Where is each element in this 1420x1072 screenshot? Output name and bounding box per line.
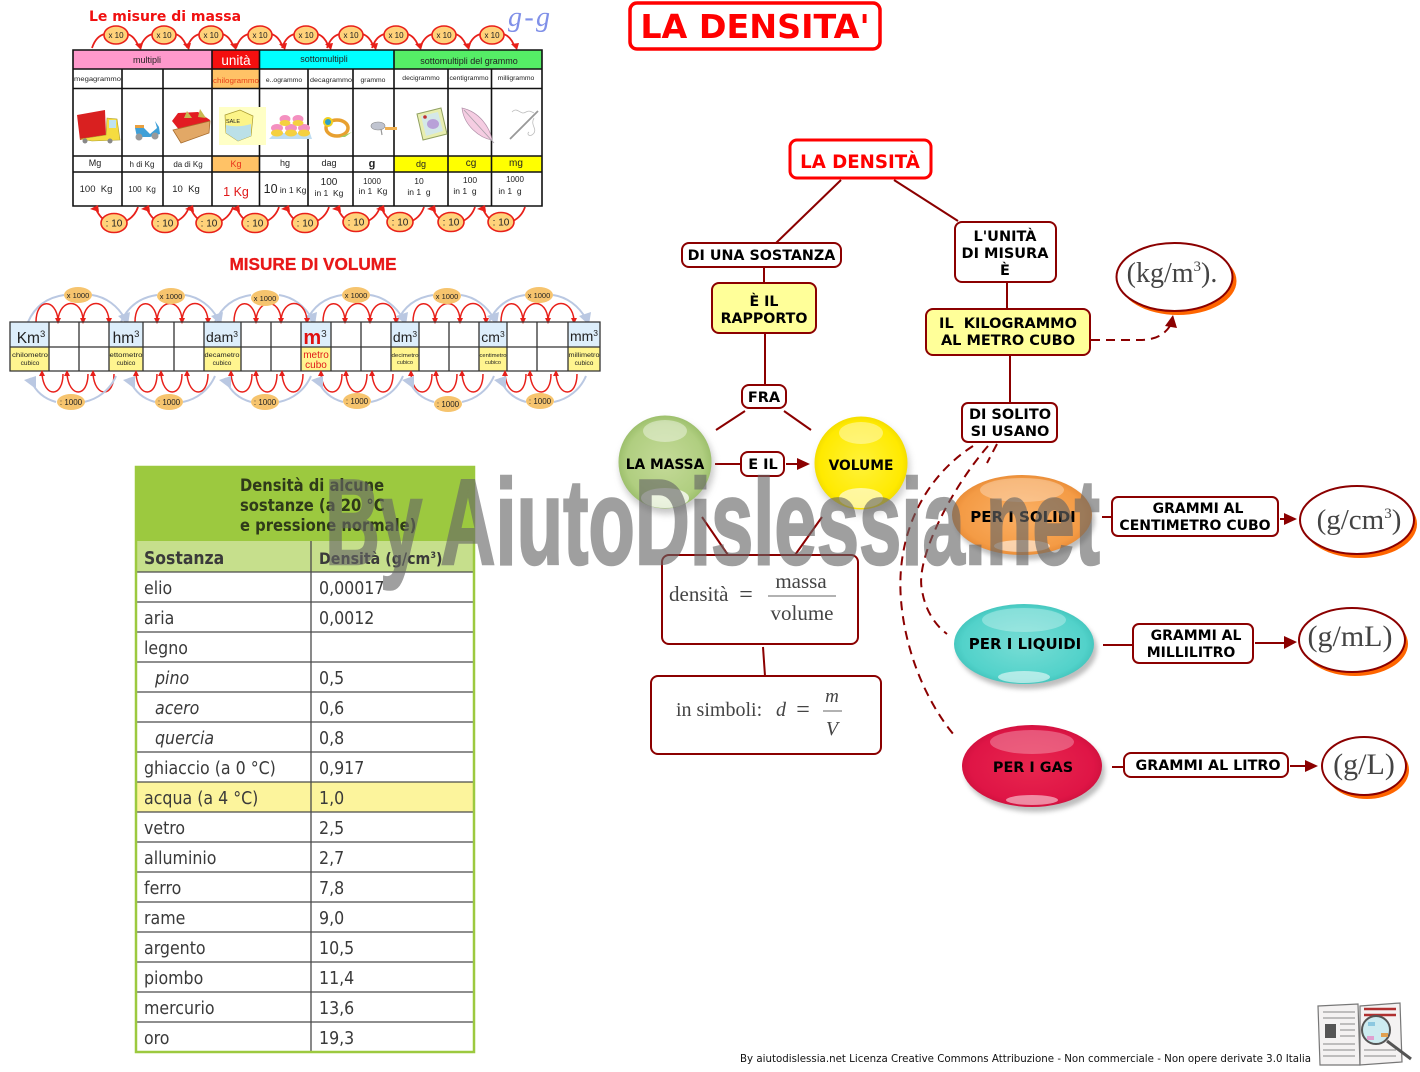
- density table: 0,5: [319, 669, 344, 689]
- density table: oro: [144, 1029, 169, 1049]
- icon: needle and thread: [510, 110, 538, 139]
- divide by ten arrows: : 10: [106, 218, 123, 230]
- volume units table: cubo: [305, 360, 327, 371]
- unit: kg/m3: (kg/m: [1127, 258, 1194, 289]
- mass units table: 10 in 1 Kg: [264, 182, 307, 196]
- volume units table: cubico: [213, 360, 232, 367]
- volume units table: 3: [134, 329, 139, 340]
- volume units table: millimetro: [568, 352, 600, 359]
- mass units table: dg: [416, 159, 426, 169]
- node: grammi al litro: [1124, 753, 1288, 777]
- formula: symbols: m: [825, 686, 839, 707]
- unit: g/cm3: [1300, 486, 1417, 558]
- divide by ten arrows: : 10: [247, 218, 264, 230]
- density table: Densità di alcune: [240, 476, 384, 495]
- volume units table: Km: [17, 330, 40, 347]
- node: il kilogrammo al metro cubo: [926, 309, 1090, 355]
- density table: 0,6: [319, 699, 344, 719]
- multiply by ten arrows: [92, 26, 519, 50]
- volume multiply arcs: x 1000: [528, 291, 550, 300]
- mass units table: in 1 g: [407, 187, 431, 197]
- oval: per i gas: PER I GAS: [993, 760, 1073, 776]
- unit: g/mL: [1299, 608, 1408, 676]
- node: fra: [742, 385, 786, 408]
- node: e il with arrow: E IL: [748, 457, 778, 473]
- density table: mercurio: [144, 999, 215, 1019]
- node: grammi al centimetro cubo: [1112, 497, 1278, 536]
- multiply by ten arrows: x 10: [203, 31, 219, 40]
- volume units table: cubico: [397, 360, 413, 366]
- formula: symbols: =: [796, 697, 810, 723]
- volume units table: [10, 322, 600, 371]
- formula: symbols: in simboli:: [676, 699, 762, 721]
- oval: per i solidi: [952, 475, 1095, 560]
- volume units table: cubico: [575, 360, 594, 367]
- node: l'unità di misura è: È: [1000, 262, 1010, 279]
- volume units table: decametro: [204, 352, 240, 359]
- density table: 19,3: [319, 1029, 354, 1049]
- node: grammi al litro: GRAMMI AL LITRO: [1135, 758, 1281, 774]
- volume units table: 3: [412, 329, 417, 339]
- volume units table: dam: [206, 329, 233, 345]
- icon: ring: [323, 117, 352, 137]
- multiply by ten arrows: x 10: [343, 31, 359, 40]
- mass units table: sottomultipli: [300, 54, 348, 64]
- multiply by ten arrows: x 10: [298, 31, 314, 40]
- density table: elio: [144, 579, 172, 599]
- volume divide arcs: : 1000: [346, 397, 369, 406]
- volume divide arcs: : 1000: [437, 400, 460, 409]
- mass units table: in 1 Kg: [315, 188, 344, 198]
- volume units table: dm: [393, 329, 412, 345]
- mass units table: in 1 g: [453, 186, 477, 196]
- density table: 10,5: [319, 939, 354, 959]
- unit: g/cm3: ): [1392, 504, 1401, 536]
- density table: 0,0012: [319, 609, 374, 629]
- sphere: volume: [814, 416, 910, 515]
- volume units table: 3: [233, 329, 238, 339]
- density table: pino: [154, 669, 189, 689]
- volume divide arcs: : 1000: [60, 398, 83, 407]
- mass units table: [73, 50, 542, 206]
- multiply by ten arrows: x 10: [156, 31, 172, 40]
- oval: per i liquidi: PER I LIQUIDI: [969, 635, 1081, 653]
- volume units table: 3: [321, 329, 327, 340]
- mass units table: 1 Kg: [223, 185, 249, 199]
- divide by ten arrows: : 10: [348, 218, 365, 228]
- oval: per i gas: [962, 725, 1105, 812]
- density table: ): [436, 549, 442, 568]
- mass units table: 100: [463, 175, 477, 185]
- mass units table: unità: [221, 53, 251, 68]
- icon: pin: [371, 122, 397, 135]
- multiply by ten arrows: x 10: [108, 31, 124, 40]
- icon: crate of apples: [172, 109, 210, 143]
- divide by ten arrows: : 10: [297, 218, 314, 230]
- density table: piombo: [144, 969, 203, 989]
- density table: 2,5: [319, 819, 344, 839]
- mass units table: megagrammo: [74, 76, 121, 83]
- volume units table: 3: [500, 329, 505, 339]
- icon: pastries: [269, 115, 312, 139]
- density table: vetro: [144, 819, 185, 839]
- volume units table: cubico: [117, 360, 136, 367]
- node: di una sostanza: DI UNA SOSTANZA: [688, 248, 835, 264]
- sphere: volume: VOLUME: [829, 458, 893, 474]
- node: di solito si usano: [962, 403, 1057, 442]
- node: è il rapporto: È IL: [750, 293, 778, 310]
- density table: rame: [144, 909, 185, 929]
- connector lines: [702, 180, 1133, 767]
- density table: e pressione normale): [240, 516, 416, 535]
- node: e il with arrow: [741, 452, 810, 476]
- multiply by ten arrows: x 10: [388, 31, 404, 40]
- node: di solito si usano: SI USANO: [971, 424, 1049, 440]
- mass units table: hg: [280, 158, 290, 168]
- divide by ten arrows: : 10: [493, 218, 510, 228]
- icon: feather: [462, 108, 494, 143]
- density table: Sostanza: [144, 549, 224, 569]
- mass units table: g: [369, 158, 375, 170]
- density table: acero: [155, 699, 199, 719]
- icon: salt box: [219, 107, 266, 145]
- mass units table: 100 Kg: [80, 184, 112, 195]
- density table: legno: [144, 639, 188, 659]
- density table: 9,0: [319, 909, 344, 929]
- mass units table: dag: [321, 158, 337, 168]
- unit: kg/m3: 3: [1194, 259, 1201, 275]
- volume units table: decimetro: [392, 353, 418, 359]
- footer licence text: By aiutodislessia.net Licenza Creative Commons Attribuzione - Non commerciale - Non opere derivate 3.0 Italia: [740, 1052, 1311, 1065]
- volume units table: cubico: [21, 360, 40, 367]
- volume divide arcs: [24, 370, 586, 412]
- node: grammi al millilitro: [1133, 624, 1253, 663]
- density table: sostanze (a 20 °C: [240, 496, 385, 515]
- unit: g/mL: (g/mL): [1308, 620, 1392, 653]
- mass units table: cg: [466, 158, 476, 169]
- density table: ghiaccio (a 0 °C): [144, 759, 276, 779]
- mass units table: Mg: [89, 158, 101, 168]
- mass units table: in 1 g: [498, 186, 522, 196]
- volume multiply arcs: x 1000: [436, 292, 458, 301]
- mass units table: chilogrammo: [213, 76, 259, 85]
- volume units table: chilometro: [12, 352, 48, 359]
- mass units table: mg: [509, 158, 523, 169]
- density table: 3: [430, 551, 436, 561]
- node: la densità: [790, 140, 931, 178]
- mass units table: grammo: [361, 77, 386, 84]
- volume units table: 3: [40, 329, 45, 340]
- unit: g/L: [1322, 737, 1409, 799]
- sphere: la massa: [618, 416, 714, 514]
- formula: symbols: d: [776, 699, 787, 721]
- volume units table: ettometro: [110, 352, 143, 359]
- density table: 0,00017: [319, 579, 384, 599]
- density table: 0,8: [319, 729, 344, 749]
- node: grammi al centimetro cubo: CENTIMETRO CUBO: [1119, 518, 1271, 534]
- mass units table: 100: [321, 177, 338, 188]
- divide by ten arrows: : 10: [443, 218, 460, 228]
- sphere: la massa: LA MASSA: [626, 457, 705, 473]
- mass units table: decigrammo: [402, 75, 440, 82]
- node: l'unità di misura è: DI MISURA: [962, 246, 1049, 262]
- density table: 0,917: [319, 759, 364, 779]
- density table: [136, 467, 474, 1052]
- arrow to g/L: [1290, 760, 1318, 772]
- node: è il rapporto: [712, 283, 816, 333]
- node: fra: FRA: [748, 390, 781, 406]
- arrow to g/cm3: [1280, 513, 1297, 525]
- heading: le misure di massa: Le misure di massa: [89, 9, 241, 25]
- volume multiply arcs: x 1000: [67, 291, 89, 300]
- heading: misure di volume: MISURE DI VOLUME: [229, 254, 397, 274]
- icon: open book with magnifier: [1318, 1003, 1411, 1065]
- density table: Densità (g/cm: [319, 549, 430, 568]
- divide by ten arrows: : 10: [157, 218, 174, 230]
- handwritten note: g - g: [508, 2, 550, 33]
- volume units table: cubico: [485, 360, 501, 366]
- volume units table: cm: [481, 329, 500, 345]
- arrow to g/mL: [1255, 636, 1297, 649]
- formula: density: densità: [669, 582, 729, 606]
- density table: acqua (a 4 °C): [144, 789, 258, 809]
- formula: density: =: [739, 582, 753, 608]
- dashed connectors to states of matter: [900, 444, 997, 735]
- unit: kg/m3: ).: [1201, 258, 1217, 289]
- volume units table: hm: [113, 330, 134, 347]
- volume units table: mm: [570, 328, 593, 344]
- volume divide arcs: : 1000: [254, 398, 277, 407]
- volume units table: centimetro: [480, 353, 506, 359]
- mass units table: 100 Kg: [128, 185, 156, 194]
- volume multiply arcs: x 1000: [160, 292, 182, 301]
- mass units table: milligrammo: [498, 75, 535, 82]
- multiply by ten arrows: x 10: [436, 31, 452, 40]
- density table: aria: [144, 609, 174, 629]
- density table: 2,7: [319, 849, 344, 869]
- formula: density: volume: [770, 601, 834, 625]
- density table: 1,0: [319, 789, 344, 809]
- mass units table: multipli: [133, 55, 161, 65]
- node: l'unità di misura è: [955, 222, 1056, 282]
- mass units table: sottomultipli del grammo: [420, 56, 518, 66]
- unit: g/cm3: 3: [1384, 506, 1392, 522]
- formula: symbols: V: [826, 718, 841, 740]
- volume units table: metro: [303, 350, 329, 361]
- density table: argento: [144, 939, 206, 959]
- mass units table: Kg: [230, 159, 242, 169]
- volume multiply arcs: x 1000: [345, 291, 367, 300]
- title: LA DENSITA': [640, 7, 870, 46]
- multiply by ten arrows: x 10: [484, 31, 500, 40]
- unit: g/cm3: (g/cm: [1317, 504, 1384, 536]
- density table: quercia: [155, 729, 214, 749]
- density table: alluminio: [144, 849, 216, 869]
- oval: per i liquidi: [954, 604, 1097, 689]
- volume multiply arcs: [28, 287, 591, 325]
- node: grammi al millilitro: GRAMMI AL: [1151, 628, 1241, 644]
- volume units table: 3: [593, 328, 598, 338]
- volume divide arcs: : 1000: [529, 397, 552, 406]
- mass units table: 10 Kg: [172, 184, 200, 195]
- dashed arrow to kg/m3: [1091, 315, 1177, 340]
- mass units table: decagrammo: [310, 77, 352, 84]
- formula: density: [662, 555, 858, 644]
- density table: 7,8: [319, 879, 344, 899]
- icon: scooter: [135, 121, 160, 140]
- oval: per i solidi: PER I SOLIDI: [970, 508, 1076, 526]
- mass units table: in 1 Kg: [359, 186, 388, 196]
- density table: 13,6: [319, 999, 354, 1019]
- volume divide arcs: : 1000: [158, 398, 181, 407]
- mass units table: 10: [414, 176, 424, 186]
- divide by ten arrows: : 10: [201, 218, 218, 230]
- icon: stamp: [417, 108, 447, 140]
- node: di una sostanza: [682, 243, 841, 267]
- multiply by ten arrows: x 10: [252, 31, 268, 40]
- icon: truck: [77, 110, 120, 144]
- node: grammi al millilitro: MILLILITRO: [1147, 645, 1235, 661]
- node: di solito si usano: DI SOLITO: [969, 407, 1051, 423]
- icon: salt box: SALE: [226, 119, 240, 125]
- node: è il rapporto: RAPPORTO: [721, 311, 807, 327]
- node: grammi al centimetro cubo: GRAMMI AL: [1153, 501, 1243, 517]
- density table: 11,4: [319, 969, 354, 989]
- volume units table: m: [303, 327, 321, 349]
- node: l'unità di misura è: L'UNITÀ: [974, 228, 1037, 245]
- divide by ten arrows: : 10: [392, 218, 409, 228]
- formula: density: massa: [775, 569, 827, 593]
- mass units table: e..ogrammo: [266, 77, 302, 84]
- density table: ferro: [144, 879, 181, 899]
- mass units table: centigrammo: [450, 75, 489, 82]
- mass units table: da di Kg: [173, 160, 203, 169]
- divide by ten arrows: [90, 205, 525, 232]
- unit: kg/m3: [1116, 243, 1236, 315]
- mass units table: h di Kg: [130, 160, 154, 169]
- node: la densità: LA DENSITÀ: [800, 151, 920, 173]
- unit: g/L: (g/L): [1333, 748, 1395, 781]
- node: il kilogrammo al metro cubo: IL KILOGRAMMO: [939, 316, 1077, 332]
- mass units table: 1000: [363, 177, 381, 186]
- volume multiply arcs: x 1000: [254, 294, 276, 303]
- node: il kilogrammo al metro cubo: AL METRO CUBO: [941, 333, 1075, 349]
- mass units table: 1000: [506, 175, 524, 184]
- formula: symbols: [651, 676, 881, 754]
